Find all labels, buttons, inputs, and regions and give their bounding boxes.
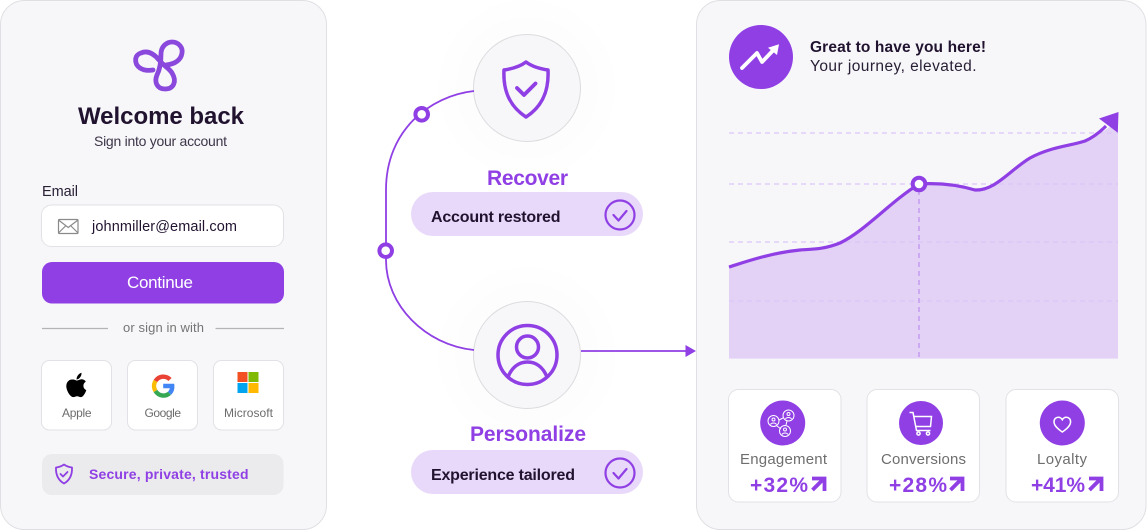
icon: up arrow (950, 478, 962, 491)
chart node (913, 178, 925, 190)
label: google: Google (144, 406, 181, 420)
label: Conversions (881, 451, 966, 468)
google button (128, 360, 198, 430)
arrow head (1099, 112, 1118, 133)
email value: johnmiller@email.com (91, 219, 237, 235)
divider: or sign in with: or sign in with (123, 320, 204, 335)
heading: personalize: Personalize (470, 423, 586, 446)
email input (42, 205, 284, 246)
label: Engagement (740, 451, 828, 468)
heading: recover: Recover (487, 167, 568, 190)
trust badge (42, 454, 284, 495)
node (415, 108, 428, 121)
icon halo (439, 0, 615, 176)
node (379, 244, 392, 257)
subtitle: Sign into your account (94, 133, 227, 149)
icon: heart (1054, 417, 1071, 432)
icon: up arrow (812, 478, 824, 491)
header text: Great to have you here! (810, 39, 986, 56)
logo (136, 42, 182, 89)
panel: sign in (0, 0, 326, 530)
header text (810, 39, 986, 75)
icon: network (768, 410, 794, 436)
arrow to results (581, 345, 696, 357)
icon: up arrow (1089, 478, 1102, 491)
area chart (729, 112, 1118, 359)
icon: shield (504, 62, 548, 117)
pill (411, 450, 643, 494)
icon: user (498, 326, 557, 384)
continue button: Continue (127, 273, 193, 292)
value: +28% (889, 474, 947, 497)
icon: envelope (58, 220, 78, 234)
continue button (42, 262, 284, 304)
icon: small shield (56, 464, 72, 484)
chart area (729, 122, 1118, 359)
label: Loyalty (1037, 451, 1088, 468)
icon: google (154, 377, 172, 396)
value: +32% (750, 474, 808, 497)
connector line (379, 91, 474, 350)
icon halo (439, 267, 615, 443)
stat card: engagement (728, 390, 841, 502)
email label: Email (42, 184, 78, 200)
stat card: conversions (867, 390, 980, 502)
step: recover (411, 0, 643, 236)
step: personalize (411, 267, 643, 494)
icon: cart (910, 412, 932, 435)
pill: Experience tailored (431, 467, 575, 484)
badge text: Secure, private, trusted (89, 466, 248, 482)
pill: Account restored (431, 209, 560, 226)
panel: results (696, 0, 1146, 530)
header text: Your journey, elevated. (810, 58, 976, 75)
apple button (42, 360, 112, 430)
heading: welcome back: Welcome back (78, 103, 245, 130)
icon: microsoft (238, 372, 258, 393)
label: microsoft: Microsoft (224, 406, 274, 420)
grid lines (729, 133, 1118, 358)
value: +41% (1031, 474, 1085, 497)
pill (411, 192, 643, 236)
icon: growth badge (729, 25, 793, 89)
stat card: loyalty (1006, 390, 1118, 502)
label: apple: Apple (62, 406, 92, 420)
microsoft button (214, 360, 284, 430)
icon: apple (66, 373, 86, 397)
trend line (729, 126, 1106, 267)
